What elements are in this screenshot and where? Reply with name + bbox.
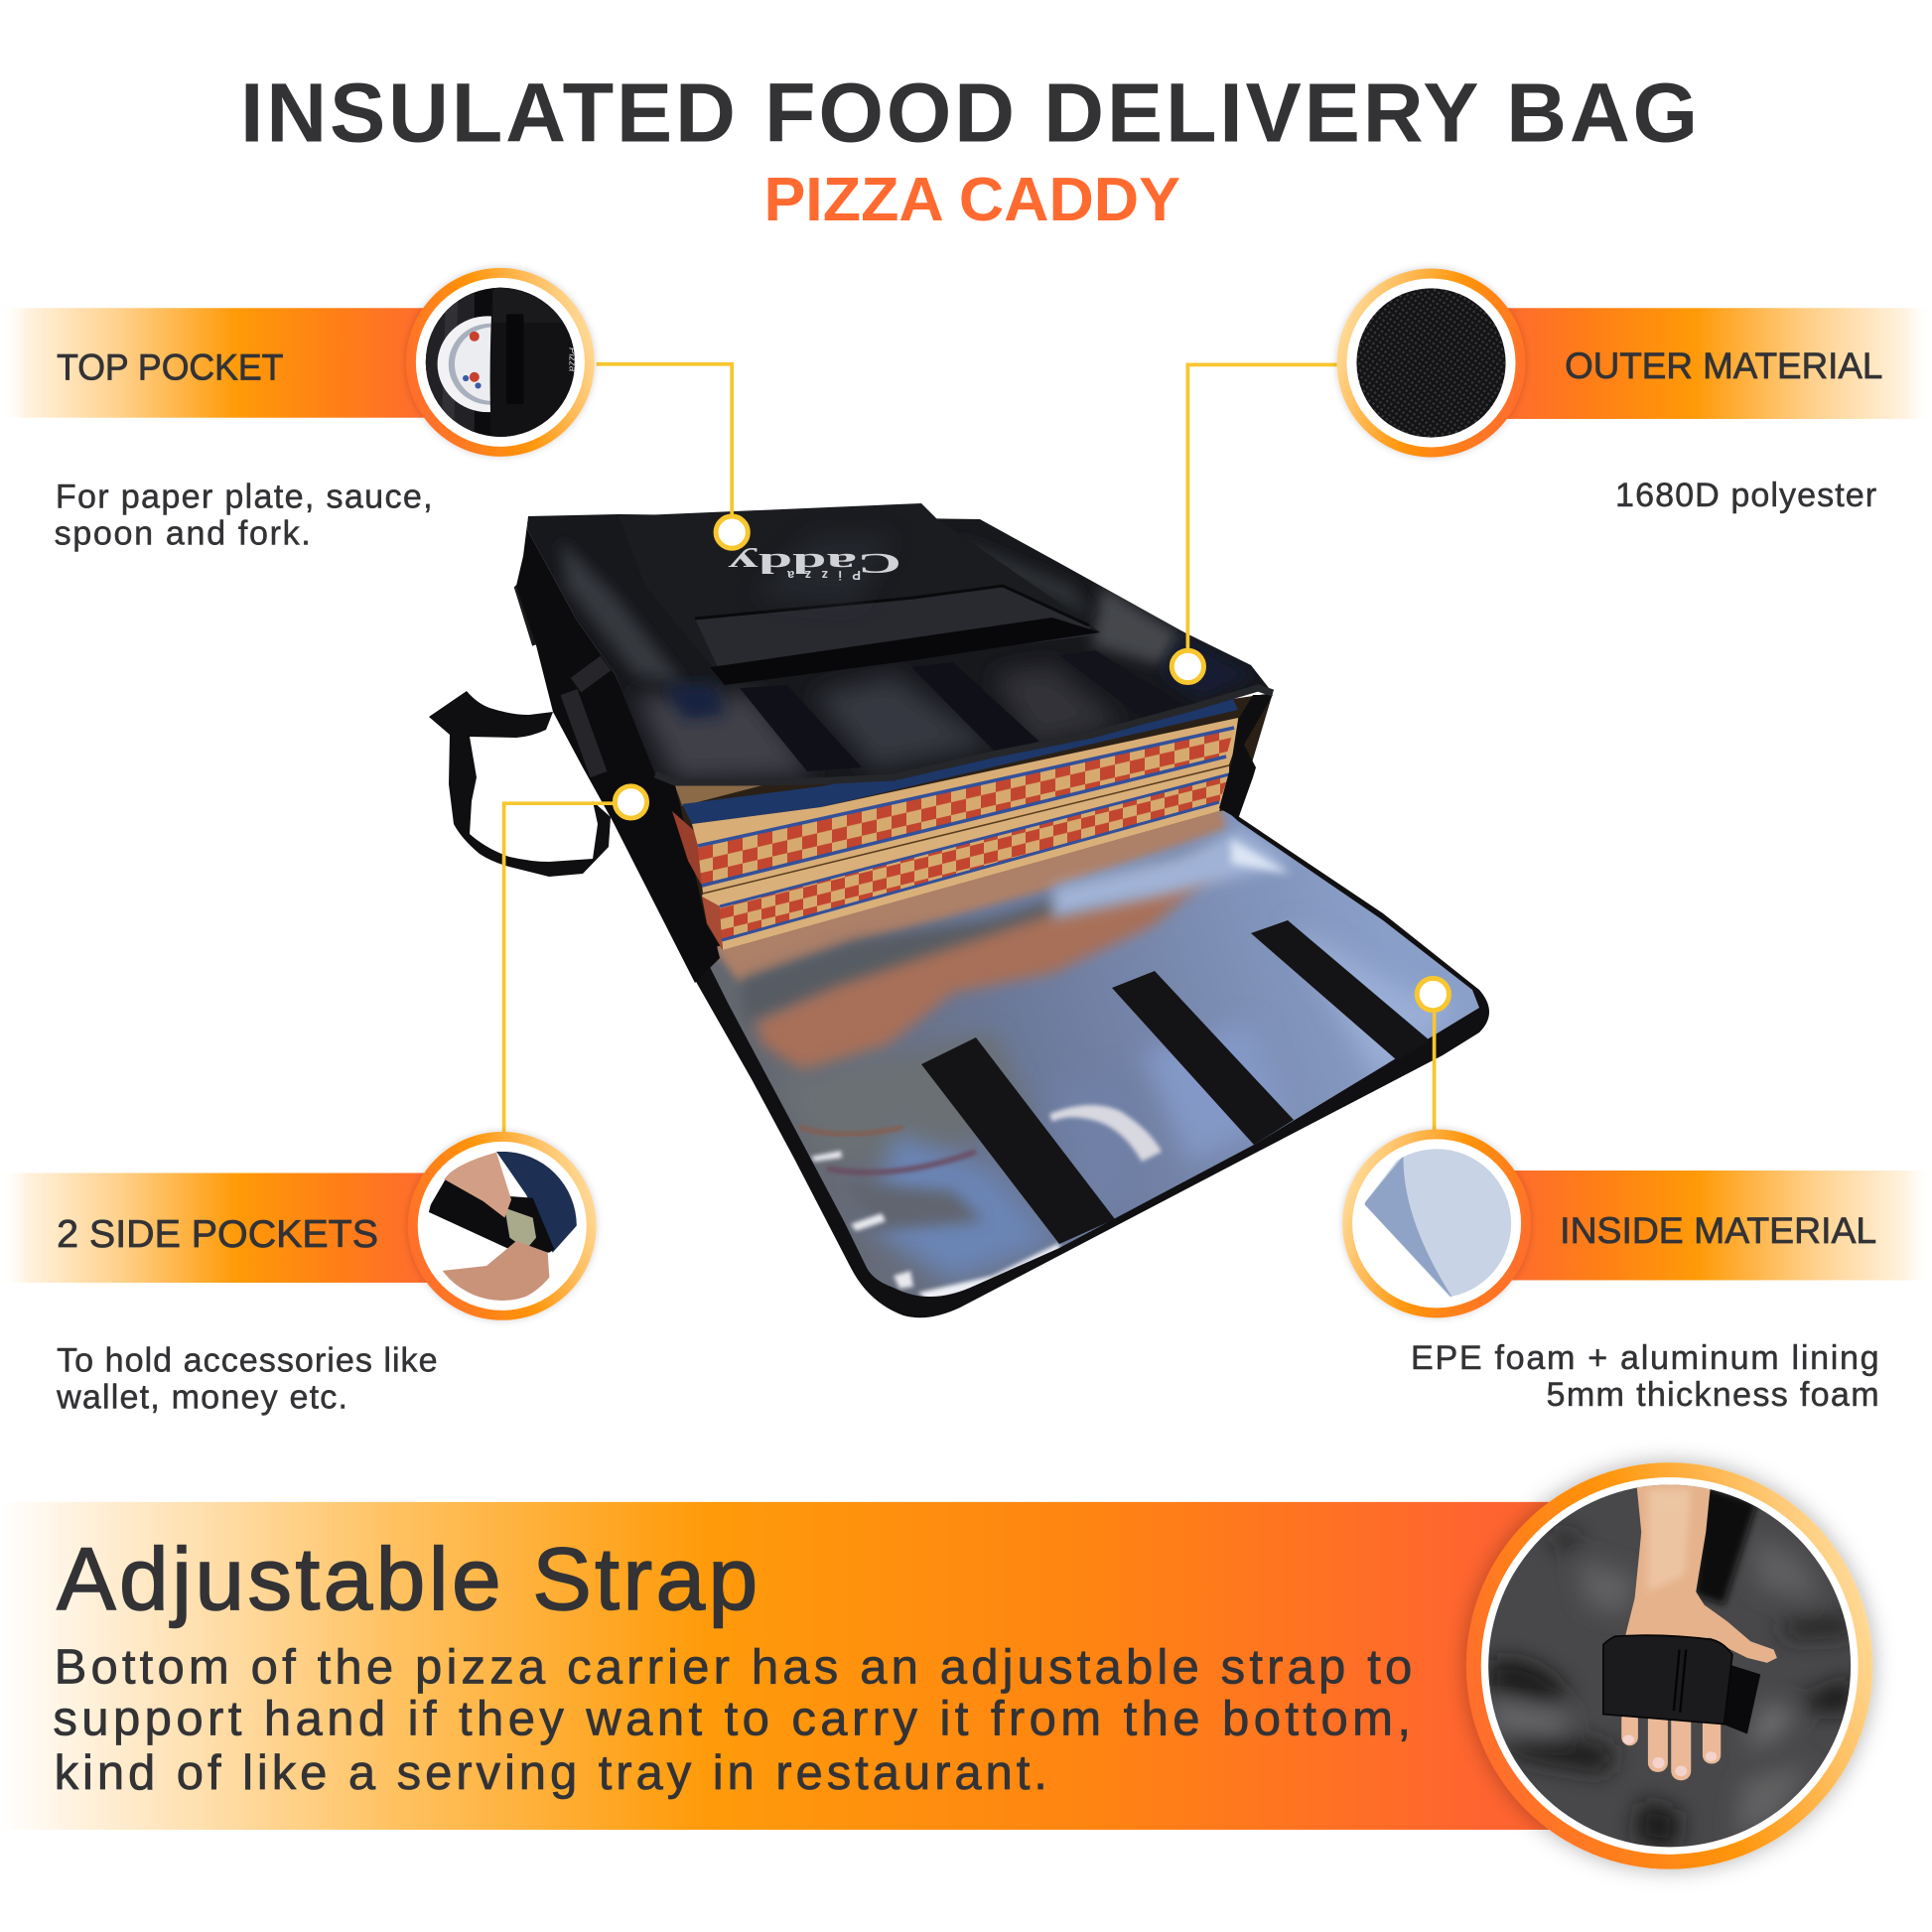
- flap velcro strips: [921, 1037, 1115, 1244]
- band: [1501, 308, 1932, 419]
- panel: outer material: [1337, 269, 1932, 457]
- panel: inside material description: 5mm thickness foam: [1547, 1376, 1879, 1414]
- copper reflections: [710, 799, 1226, 983]
- top pocket: [619, 503, 1100, 685]
- arm shadow: [1695, 1486, 1757, 1605]
- photo: foam sample: [1364, 1149, 1511, 1297]
- wrist strap: [1603, 1635, 1732, 1725]
- panel: inside material description: EPE foam + aluminum lining: [1411, 1339, 1879, 1377]
- title: INSULATED FOOD DELIVERY BAG: [240, 67, 1698, 160]
- box side: [672, 811, 702, 886]
- connector dot: outer material: [1172, 650, 1204, 683]
- fingers: [1621, 1711, 1721, 1780]
- bag interior: [675, 693, 1273, 950]
- right side gusset: [1219, 695, 1273, 819]
- panel: adjustable strap banner: [0, 1462, 1872, 1869]
- front flap: [695, 799, 1489, 1317]
- lid edge trim: [655, 688, 1273, 782]
- ring: [406, 268, 595, 457]
- box top blue: [682, 695, 1238, 824]
- finger nails: [1623, 1735, 1717, 1776]
- connector dot: side pockets: [615, 786, 647, 818]
- banner body text: support hand if they want to carry it from the bottom,: [53, 1692, 1411, 1745]
- connector line: side pockets: [504, 803, 630, 1134]
- label: TOP POCKET: [57, 345, 283, 387]
- upper box cardboard: [692, 718, 1238, 894]
- arm and hand: [1625, 1482, 1777, 1663]
- lower box cardboard: [702, 764, 1229, 950]
- banner body text: [53, 1640, 1412, 1800]
- lower box check band: [720, 774, 1229, 940]
- foil shading: [802, 1029, 1035, 1152]
- label: OUTER MATERIAL: [1565, 345, 1882, 386]
- panel: side pockets: [0, 1132, 597, 1320]
- photo: fabric weave: [1356, 288, 1506, 438]
- panel: inside material description: [1411, 1339, 1879, 1414]
- panel: top pocket: [0, 268, 595, 457]
- banner heading: Adjustable Strap: [57, 1529, 758, 1628]
- panel: side pockets description: To hold accessories like: [57, 1341, 438, 1379]
- band: [0, 1173, 431, 1283]
- ring: [408, 1132, 597, 1320]
- bag body side: [516, 516, 720, 983]
- photo: plate in pocket: [425, 288, 575, 437]
- foil lining: [702, 804, 1479, 1297]
- large ring: [1466, 1462, 1872, 1869]
- bag lid: [527, 514, 1273, 782]
- pocket logo: Pizza: [786, 568, 861, 583]
- photo: hands and wallet: [424, 1149, 579, 1304]
- highlights: [1049, 1105, 1162, 1162]
- panel: top pocket description: For paper plate, sauce,: [56, 478, 433, 515]
- carrying strap: [429, 691, 611, 877]
- pizza boxes: [672, 695, 1238, 950]
- photo: hand in strap: [1479, 1479, 1860, 1860]
- banner body text: Bottom of the pizza carrier has an adjustable strap to: [55, 1640, 1412, 1694]
- banner body text: kind of like a serving tray in restaurant.: [55, 1746, 1047, 1800]
- side handle: [516, 581, 534, 645]
- pocket logo: [728, 547, 901, 583]
- connector dot: inside material: [1417, 978, 1449, 1011]
- label: 2 SIDE POCKETS: [57, 1213, 378, 1256]
- connector dot: top pocket: [716, 516, 748, 548]
- strap shadow: [1723, 1665, 1760, 1734]
- panel: side pockets description: wallet, money etc.: [56, 1379, 347, 1417]
- upper box check band: [698, 728, 1234, 886]
- ring: [1337, 269, 1525, 457]
- panel: side pockets description: [56, 1341, 438, 1417]
- banner background: [0, 1502, 1565, 1830]
- product illustration: pizza bag: [429, 503, 1489, 1317]
- fabric folds: [1489, 1529, 1854, 1850]
- connector line: inside material: [1433, 995, 1436, 1131]
- lid velcro strips: [740, 685, 862, 771]
- back cardboard: [675, 782, 774, 806]
- subtitle: PIZZA CADDY: [763, 166, 1180, 234]
- panel: top pocket description: spoon and fork.: [55, 515, 311, 553]
- logo text: Pizza: [566, 347, 577, 372]
- label: INSIDE MATERIAL: [1560, 1209, 1876, 1251]
- foil streaks: [827, 1152, 976, 1173]
- panel: top pocket description: [55, 478, 433, 553]
- pocket logo: Caddy: [728, 547, 901, 578]
- connector line: top pocket: [597, 364, 732, 532]
- connector line: outer material: [1187, 364, 1337, 666]
- panel: outer material description: 1680D polyester: [1615, 477, 1876, 514]
- band: [0, 308, 431, 418]
- band: [1506, 1171, 1932, 1280]
- ring: [1342, 1129, 1531, 1317]
- panel: inside material: [1342, 1129, 1932, 1317]
- side strap: [569, 663, 606, 774]
